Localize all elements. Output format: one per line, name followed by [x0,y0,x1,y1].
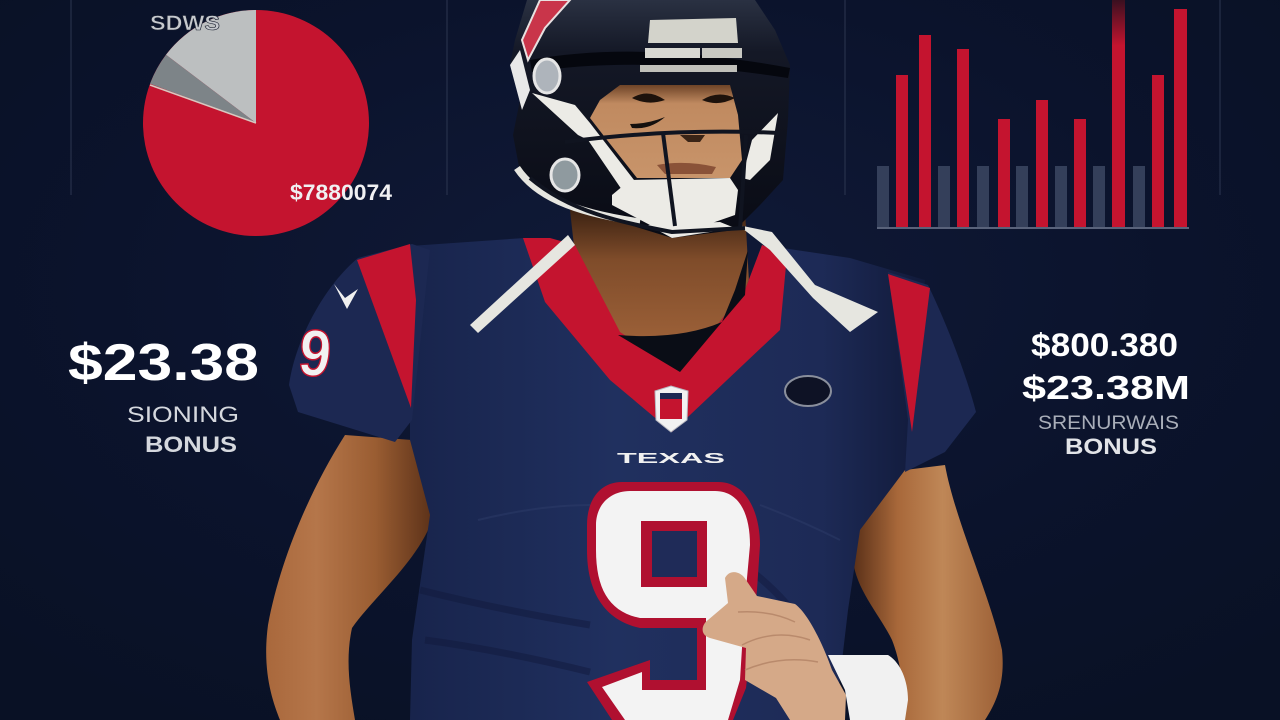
chin strap: right [738,225,878,332]
eyes [632,93,735,103]
left stat: signing bonus [68,334,259,457]
bar chart [877,0,1189,229]
collar [523,238,787,432]
right sleeve stripe [888,274,930,432]
helmet ear hole: top [534,59,560,93]
chin guard [612,178,738,230]
right stat: bonus: SRENURWAIS [1038,413,1179,434]
face [590,85,742,178]
helmet stripe [522,0,570,60]
helmet edge trim [510,50,530,110]
nose shadow [680,135,705,142]
brim bands [530,48,790,78]
right stat: bonus [1022,327,1190,459]
left stat: signing bonus: BONUS [145,432,237,457]
helmet plate [648,18,738,43]
right sleeve [888,272,976,472]
sleeve check mark [334,284,358,309]
helmet ear hole: bottom [551,159,579,191]
left sleeve stripe [357,244,416,408]
wristband [828,655,908,720]
left stat: signing bonus: $23.38 [68,334,259,392]
pie chart [143,10,393,236]
jersey body [410,238,925,720]
helmet shell [510,0,790,238]
jersey folds [478,505,840,540]
helmet [510,0,790,238]
wordmark: TEXAS [617,450,725,467]
lower helmet band [517,168,640,222]
player [266,0,1003,720]
neck [570,210,750,375]
right stat: bonus: BONUS [1065,434,1157,459]
chin strap: left [470,235,575,333]
right stat: bonus: $23.38M [1022,369,1190,406]
facemask [530,132,780,232]
pie label: bottom: $7880074 [290,180,393,205]
undershirt [618,250,748,372]
left sleeve [289,244,430,442]
cheek strips [532,93,778,190]
left stat: signing bonus: SIONING [127,402,239,427]
hand [703,572,846,720]
NFL shield [655,386,688,432]
jersey number [587,482,760,720]
chest patch [785,376,831,406]
eye black mark [630,117,665,128]
right stat: bonus: $800.380 [1031,327,1178,363]
right arm [853,465,1003,720]
left sleeve number: 9 [295,314,335,391]
lips [657,163,716,174]
pie label: top: SDWS [150,12,220,35]
left arm [266,435,434,720]
